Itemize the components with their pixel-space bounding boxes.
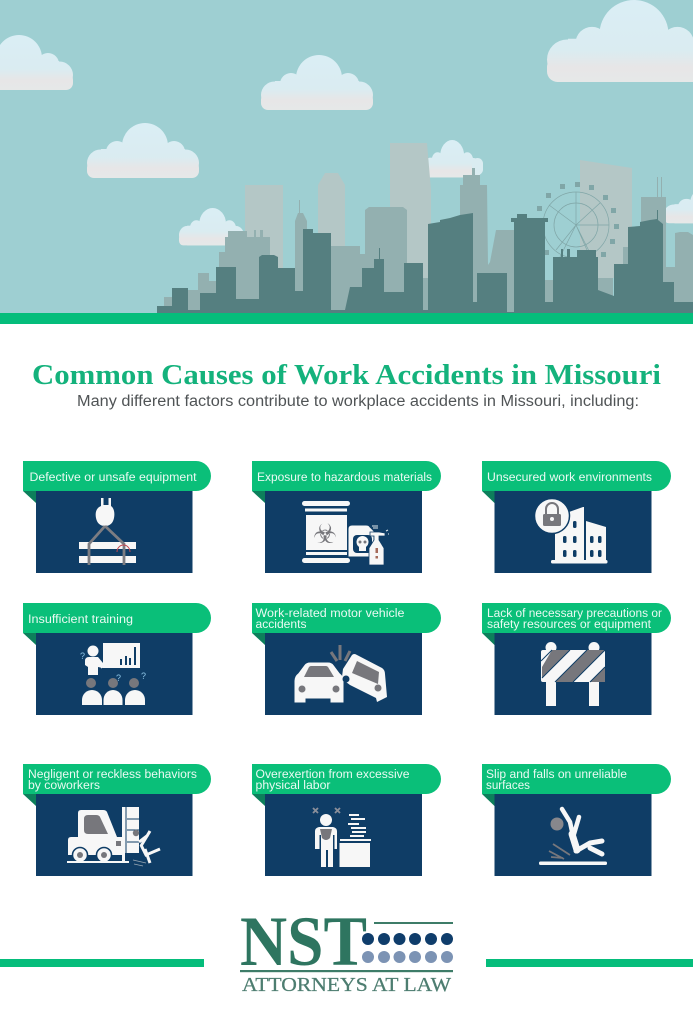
panel: lack of precautions (482, 603, 671, 715)
label line 2: by coworkers (28, 778, 100, 792)
panel: unsecured environments (482, 461, 671, 573)
skyline: far buildings (245, 143, 632, 313)
label: Lack of necessary precautions or (487, 606, 662, 620)
label line 2: surfaces (486, 778, 530, 792)
title: Common Causes of Work Accidents in Missouri (32, 360, 661, 391)
label: Exposure to hazardous materials (257, 470, 432, 484)
label line 2: safety resources or equipment (487, 617, 652, 631)
label: Work-related motor vehicle (256, 606, 405, 620)
icon: person slipping (539, 809, 607, 865)
panel: motor vehicle accidents (252, 603, 441, 715)
icon: road barricade (541, 642, 605, 706)
icon: crane hook lifting planks (79, 498, 136, 565)
panel: hazardous materials (252, 461, 441, 573)
green divider band (0, 313, 693, 324)
icon: exhausted worker at desk (313, 808, 371, 867)
icon: barrel and chemicals: ☣ (313, 519, 337, 550)
cloud: top left (0, 35, 73, 90)
label line 2: accidents (256, 617, 306, 631)
cloud: top centre (261, 55, 373, 110)
label: Negligent or reckless behaviors (28, 767, 197, 781)
logo: NST Attorneys at Law: NST (240, 903, 367, 981)
panel: defective equipment (23, 461, 211, 573)
label: Unsecured work environments (487, 470, 652, 484)
label: Defective or unsafe equipment (30, 470, 197, 484)
label: Slip and falls on unreliable (486, 767, 627, 781)
cloud: small lobe behind tower (472, 158, 483, 175)
cloud: right edge (664, 187, 693, 223)
skyline: front buildings (157, 210, 693, 314)
icon: forklift hitting worker (67, 807, 160, 866)
panel: slips and falls (482, 764, 671, 876)
ferris wheel (537, 182, 619, 300)
panel: negligent behaviors (23, 764, 211, 876)
icon: trainer and audience (80, 643, 146, 705)
label: Overexertion from excessive (256, 767, 410, 781)
icon: locked building (534, 498, 608, 564)
icon: trainer and audience: ? (141, 671, 146, 681)
label: Insufficient training (28, 612, 133, 626)
footer rule left (0, 959, 204, 967)
cloud: middle left (87, 123, 199, 178)
cloud: top right (547, 0, 693, 82)
panel: overexertion (252, 764, 441, 876)
icon: trainer and audience: ? (80, 651, 85, 661)
subtitle: Many different factors contribute to workplace accidents in Missouri, including: (77, 393, 639, 410)
logo: NST Attorneys at Law: ATTORNEYS AT LAW (242, 975, 452, 996)
label line 2: physical labor (256, 778, 330, 792)
cloud: low left (179, 208, 244, 245)
icon: barrel and chemicals (302, 501, 389, 565)
hero: sky and city skyline (0, 0, 693, 324)
logo: NST Attorneys at Law (240, 903, 453, 996)
skyline: middle buildings (164, 168, 693, 313)
icon: two cars colliding (294, 645, 387, 703)
cloud: behind towers (422, 140, 480, 177)
footer rule right (486, 959, 693, 967)
icon: trainer and audience: ? (116, 673, 121, 683)
panel: insufficient training (23, 603, 211, 715)
